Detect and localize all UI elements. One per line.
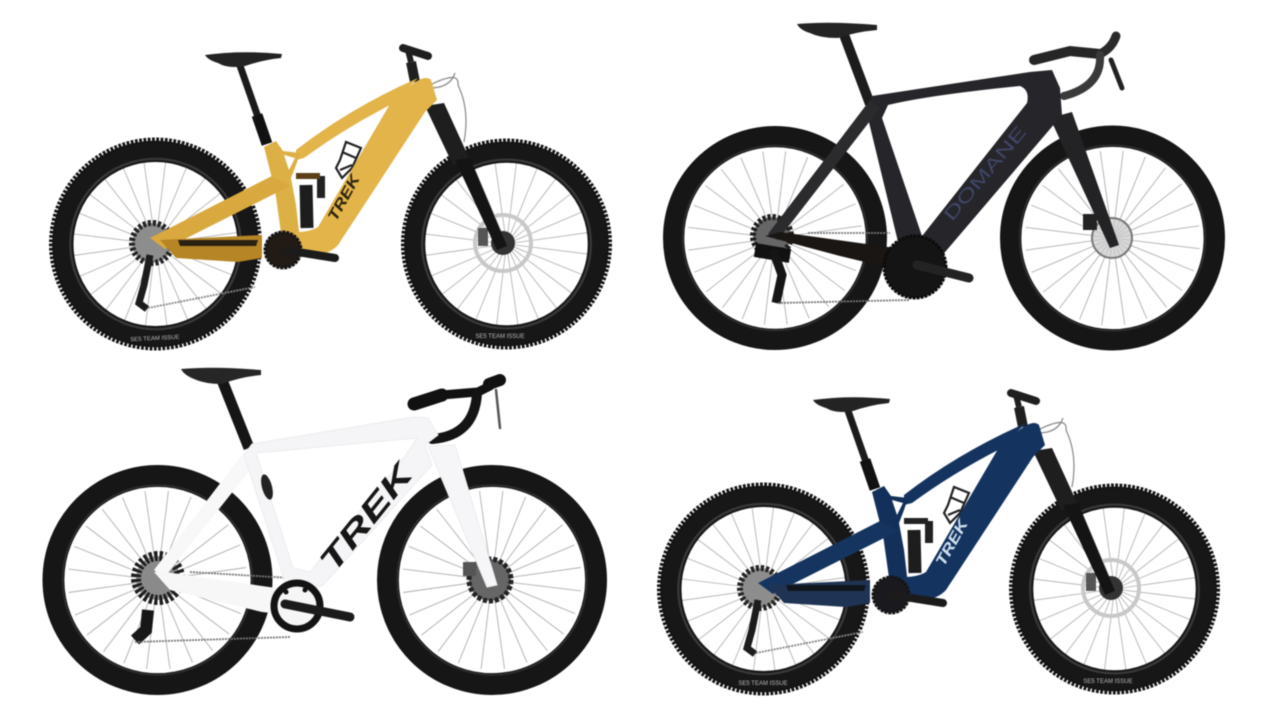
- handlebar: [1034, 36, 1122, 96]
- fork: [1050, 112, 1119, 248]
- saddle: [205, 52, 282, 67]
- front brake disc: [475, 215, 531, 271]
- bike: yellow full-suspension e-MTB: [52, 48, 609, 348]
- front disc: [463, 559, 511, 601]
- chain stay: [154, 572, 290, 615]
- seat stay: [154, 452, 258, 578]
- cassette and derailleur: [135, 556, 290, 642]
- shock and bottle cage: [904, 487, 969, 573]
- front wheel: [404, 141, 609, 347]
- front wheel: [1011, 136, 1214, 340]
- front wheel: [1012, 486, 1217, 692]
- saddle: [813, 397, 890, 412]
- rear wheel: [52, 140, 259, 348]
- tire labels: SE5 TEAM ISSUE: [1083, 679, 1133, 685]
- tire labels: [738, 679, 1133, 687]
- cassette and derailleur: [740, 568, 863, 654]
- handlebar and cables: [1011, 393, 1074, 487]
- black seat-tube emblem: [259, 473, 275, 501]
- seatpost: [846, 405, 875, 489]
- chainring and crank: [884, 236, 969, 298]
- seat tube and rocker: [872, 486, 908, 585]
- tire labels: SE5 TEAM ISSUE: [475, 334, 525, 340]
- main frame: [866, 70, 1062, 258]
- front disc: [1083, 214, 1132, 258]
- tire labels: [130, 334, 525, 343]
- seat tube and rocker: [264, 141, 300, 240]
- fork: [428, 445, 497, 587]
- bike: navy full-suspension e-MTB: [660, 393, 1217, 693]
- rear wheel: [53, 476, 262, 684]
- top tube: [296, 78, 418, 160]
- down tube: [900, 423, 1045, 599]
- motor, chainring and crank: [265, 232, 335, 268]
- front brake disc: [1083, 560, 1139, 616]
- seatpost: [843, 32, 870, 104]
- shock and bottle cage: [296, 142, 361, 228]
- seat stay: [768, 100, 880, 240]
- front wheel: [388, 476, 596, 684]
- rear triangle: [150, 176, 290, 262]
- rear wheel: [674, 137, 876, 339]
- cassette and derailleur: [753, 217, 909, 303]
- cassette and derailleur: [132, 223, 255, 309]
- fork: [425, 103, 507, 250]
- fork: [1033, 448, 1115, 595]
- saddle: [797, 23, 877, 38]
- down tube: [292, 78, 437, 254]
- TREK logo: TREK: [312, 454, 422, 578]
- top tube: [904, 423, 1026, 505]
- chain stay: [765, 232, 895, 268]
- frame decal: DOMANE: [940, 122, 1030, 225]
- bike: black drop-bar e-road: [674, 23, 1214, 340]
- bike: white gravel e-bike: [53, 368, 596, 684]
- TREK logo: TREK: [933, 516, 972, 569]
- tire labels: SE5 TEAM ISSUE: [130, 335, 180, 343]
- rear triangle: [758, 521, 898, 607]
- tire labels: SE5 TEAM ISSUE: [738, 681, 788, 687]
- seatpost: [238, 60, 267, 144]
- handlebar: [414, 380, 500, 439]
- main frame: [244, 417, 438, 590]
- handlebar and cables: [403, 48, 466, 142]
- chainring and crank: [274, 583, 350, 629]
- saddle: [181, 368, 261, 384]
- seatpost: [222, 380, 249, 448]
- rear wheel: [660, 485, 867, 693]
- motor, chainring and crank: [873, 577, 943, 613]
- TREK logo: TREK: [325, 171, 364, 224]
